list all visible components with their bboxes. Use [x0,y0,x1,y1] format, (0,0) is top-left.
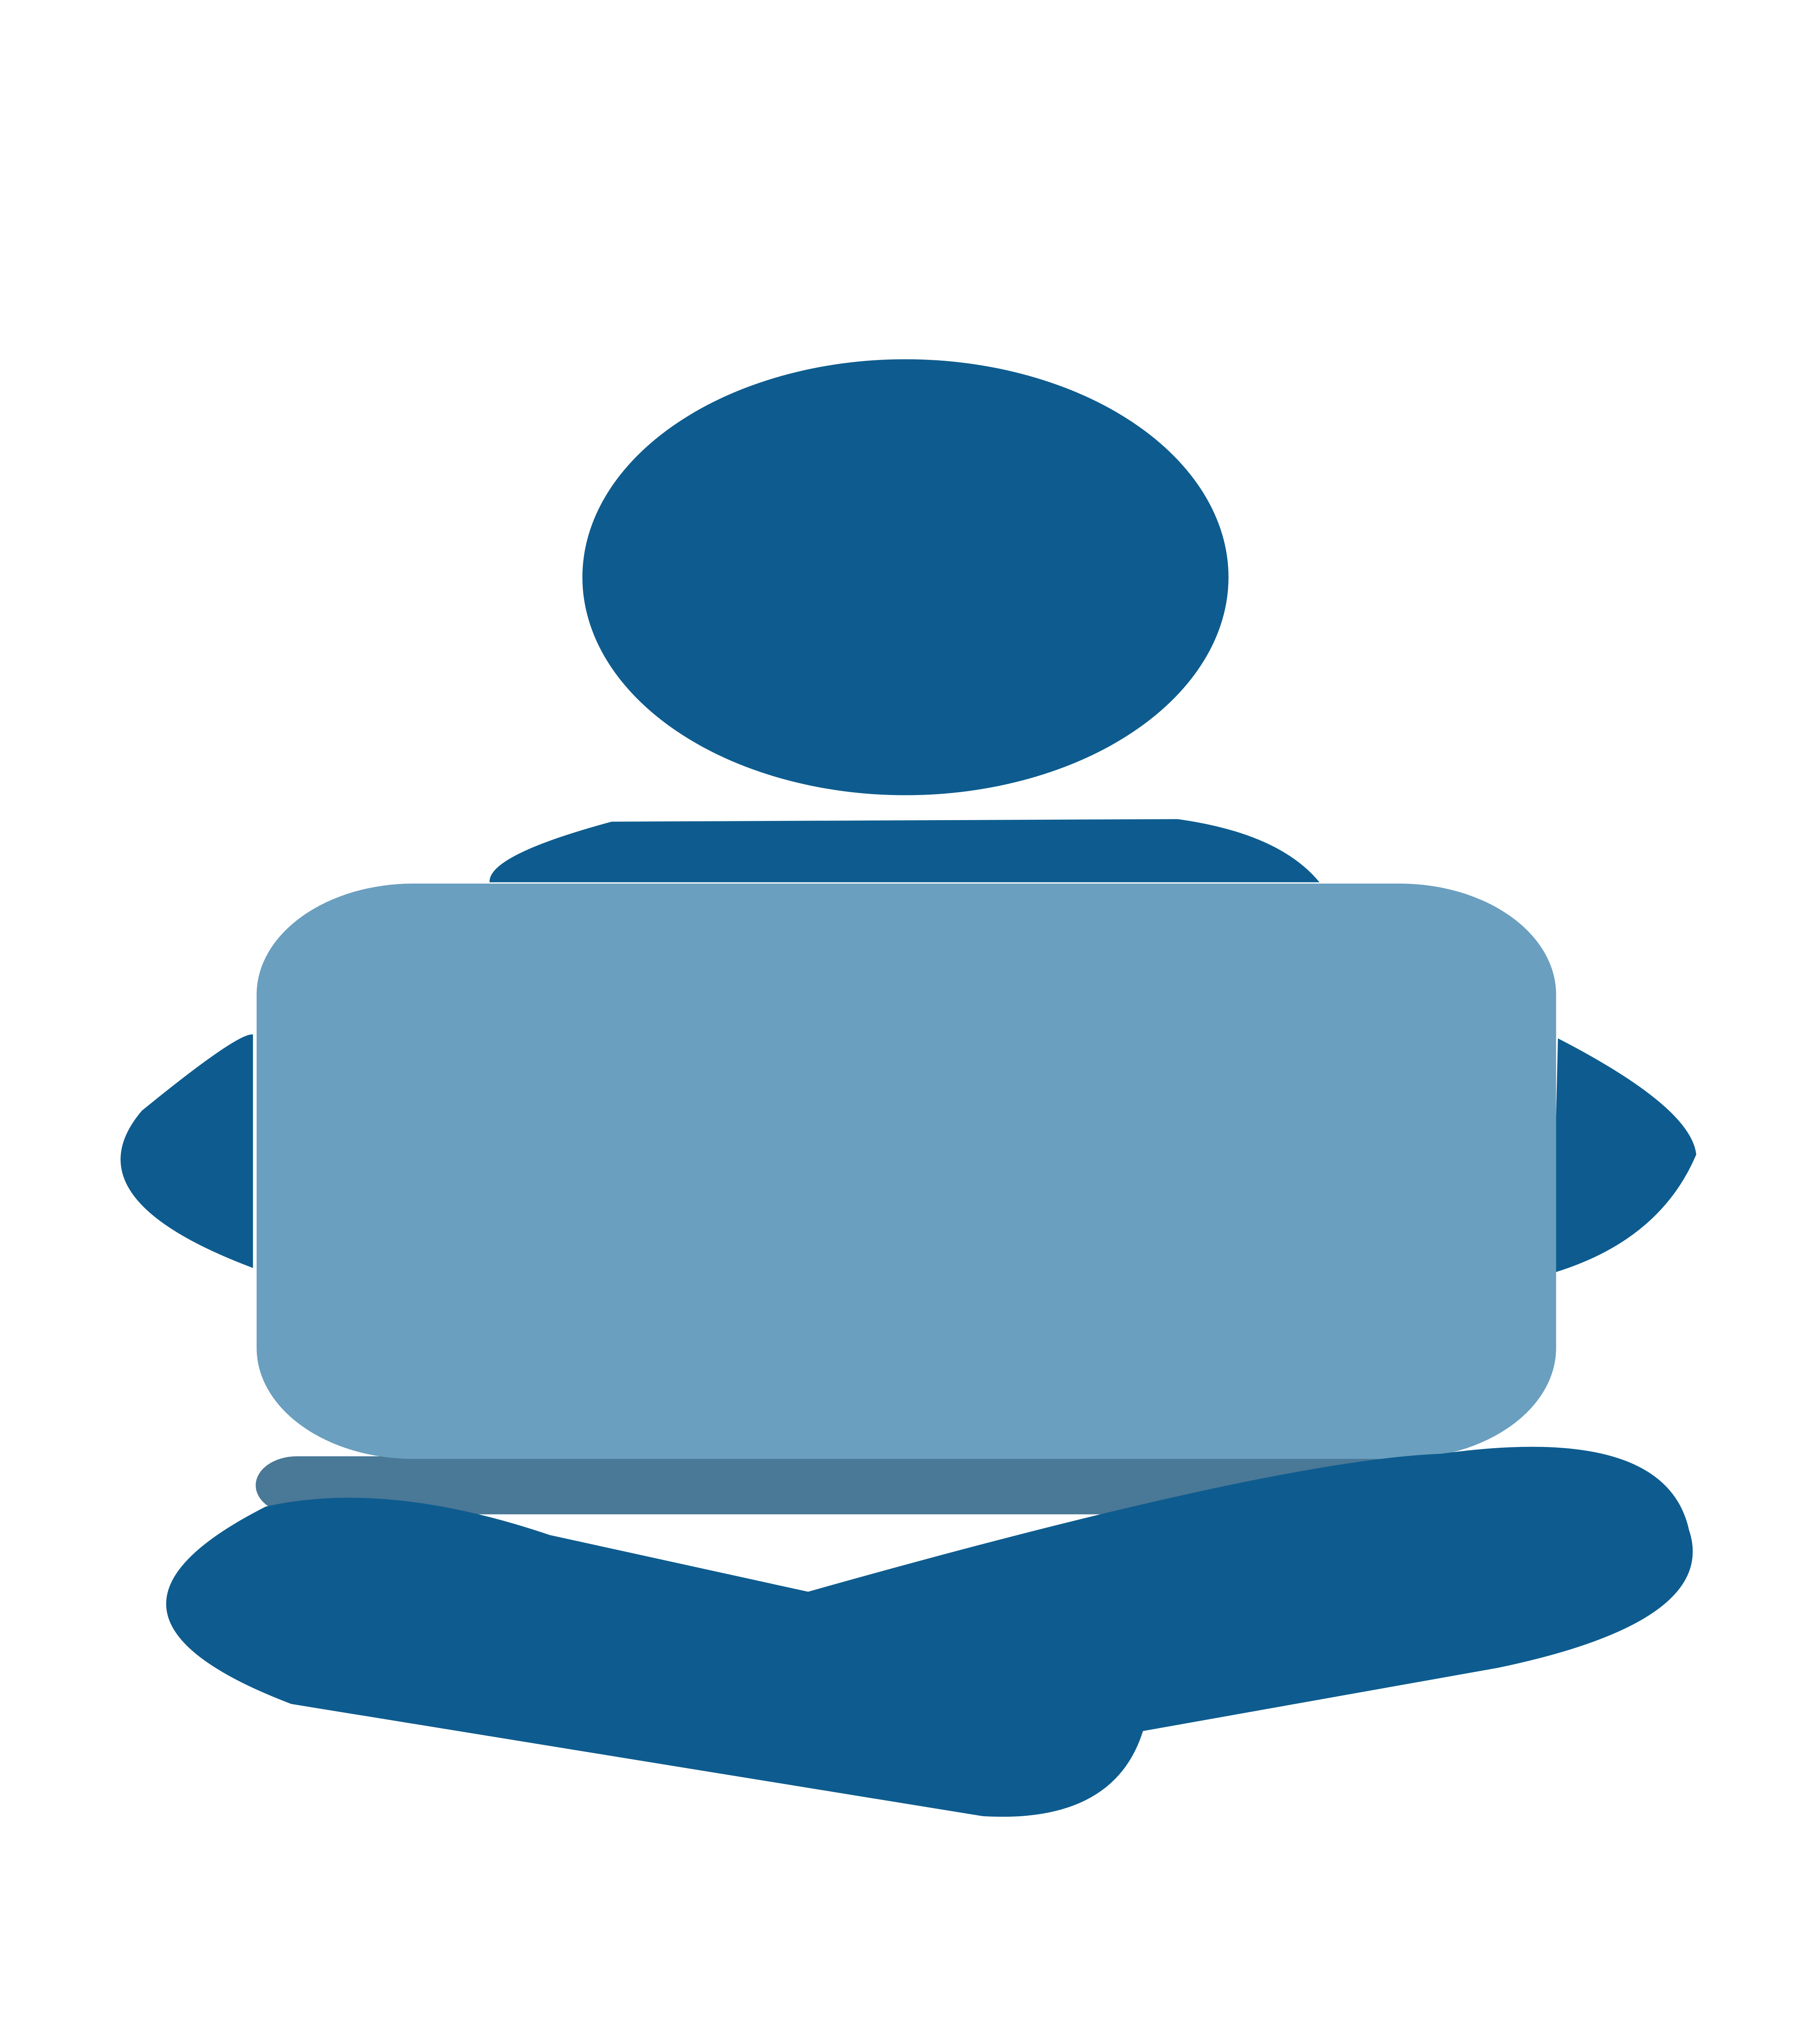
head [582,359,1229,795]
right arm [1552,1038,1696,1273]
left arm [121,1034,253,1268]
shoulders [489,819,1319,882]
laptop screen [256,884,1556,1459]
crossed legs [166,1447,1693,1817]
laptop keyboard bar [256,1456,1420,1514]
